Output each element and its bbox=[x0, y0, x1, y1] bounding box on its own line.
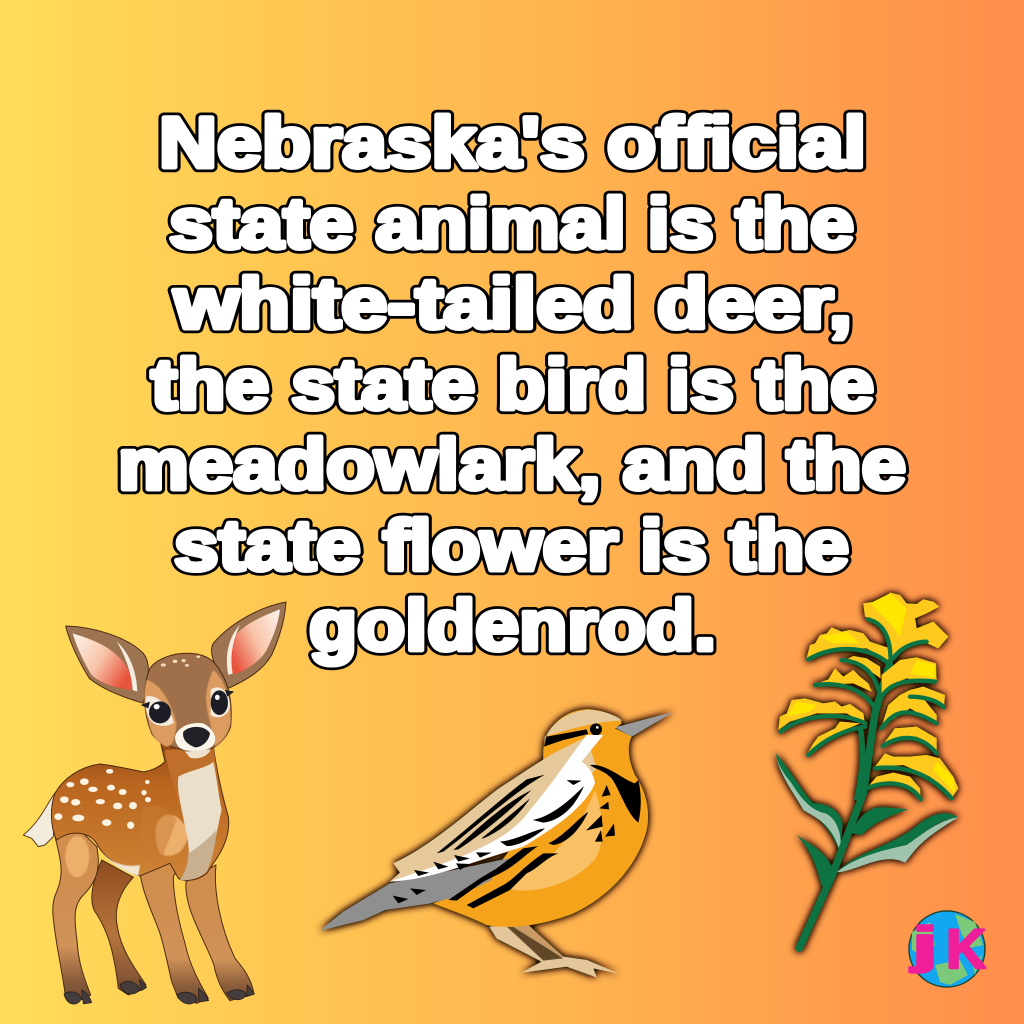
deer muzzle bbox=[175, 723, 215, 751]
goldenrod leaves bbox=[776, 753, 843, 853]
title text: Nebraska's official bbox=[159, 104, 866, 183]
logo letters bbox=[910, 917, 986, 980]
icon: western meadowlark bbox=[320, 709, 673, 977]
deer torso bbox=[51, 740, 229, 880]
bird tail grey bbox=[320, 857, 517, 931]
title text: meadowlark, and the bbox=[118, 426, 906, 505]
bird body bbox=[433, 709, 648, 927]
goldenrod bright yellow tips bbox=[787, 593, 955, 793]
logo: jK globe badge bbox=[909, 911, 986, 987]
bird eye stripe bbox=[544, 729, 588, 747]
title text bbox=[118, 104, 906, 666]
bird wing tan bbox=[390, 737, 597, 882]
deer nose bbox=[183, 727, 210, 747]
bird light belly bbox=[511, 790, 602, 890]
title text: state animal is the bbox=[169, 185, 854, 264]
title text: goldenrod. bbox=[309, 587, 716, 666]
title text: state flower is the bbox=[174, 507, 849, 586]
deer left ear bbox=[66, 626, 148, 703]
deer soft shading bbox=[65, 805, 188, 877]
title text: state flower is the bbox=[174, 507, 849, 586]
deer far hind leg bbox=[92, 860, 146, 995]
icon: goldenrod plant bbox=[776, 593, 958, 948]
deer eyes bbox=[146, 696, 174, 726]
title text: white-tailed deer, bbox=[173, 265, 852, 344]
deer hooves bbox=[64, 979, 255, 1004]
deer near fore leg bbox=[140, 853, 208, 1003]
deer tail bbox=[23, 792, 56, 847]
logo letters: K bbox=[946, 917, 986, 980]
title text: meadowlark, and the bbox=[118, 426, 906, 505]
title text: white-tailed deer, bbox=[173, 265, 852, 344]
deer neck orange bbox=[165, 747, 220, 803]
deer spots bbox=[54, 769, 151, 829]
deer far fore leg bbox=[186, 865, 254, 1001]
bird chest bib bbox=[590, 765, 641, 823]
deer face orange bbox=[144, 670, 231, 747]
title text: Nebraska's official bbox=[159, 104, 866, 183]
deer chest bbox=[178, 762, 222, 880]
title text: state animal is the bbox=[169, 185, 854, 264]
bird legs bbox=[489, 925, 618, 977]
deer head bbox=[145, 653, 231, 753]
bird head cap bbox=[544, 710, 622, 743]
goldenrod flower sprays yellow bbox=[778, 593, 958, 799]
icon: white-tailed deer fawn bbox=[23, 602, 286, 1004]
goldenrod stem bbox=[799, 665, 889, 948]
logo globe bbox=[909, 911, 985, 987]
bird white breast bbox=[390, 735, 603, 882]
logo letters: j bbox=[910, 917, 938, 973]
bird wing stripes bbox=[393, 775, 615, 908]
title text: the state bird is the bbox=[151, 346, 874, 425]
goldenrod green branch ribs bbox=[781, 619, 952, 799]
deer near hind leg bbox=[53, 823, 98, 1000]
deer right ear bbox=[212, 602, 286, 688]
title text: goldenrod. bbox=[309, 587, 716, 666]
bird beak bbox=[615, 712, 673, 737]
title text: the state bird is the bbox=[151, 346, 874, 425]
deer forehead spots bbox=[161, 655, 200, 667]
